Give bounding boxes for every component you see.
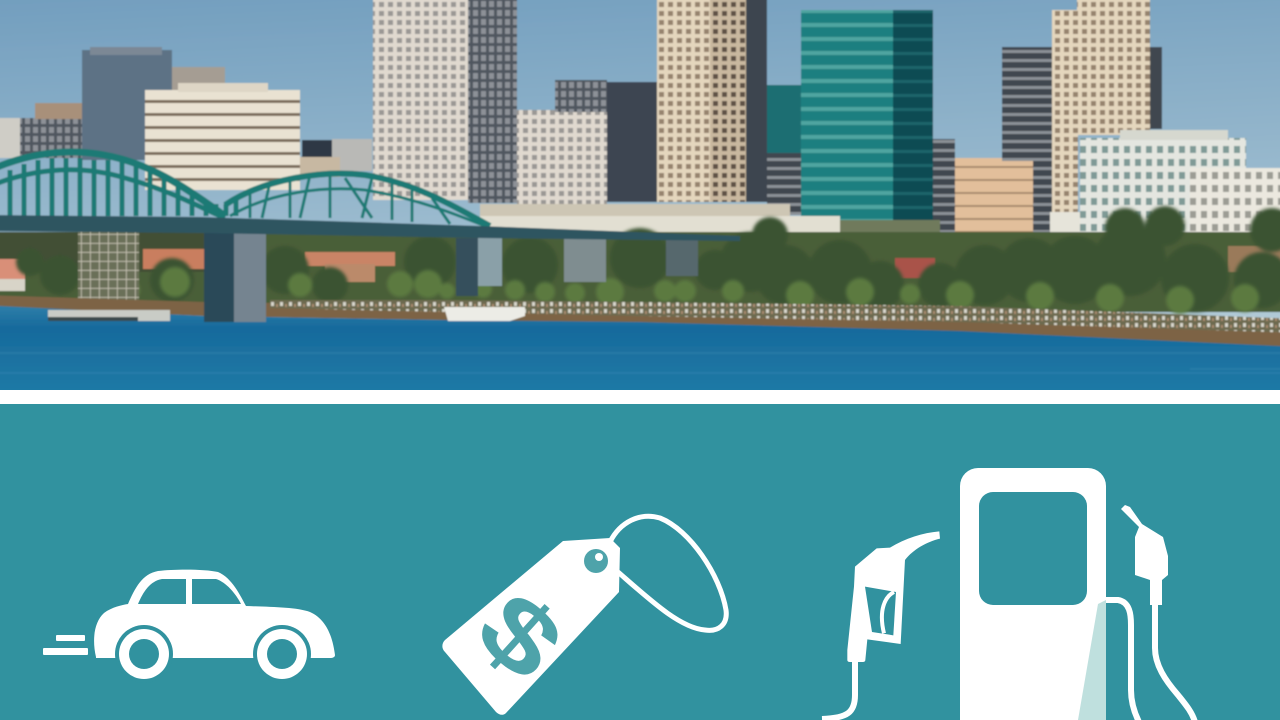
icon: fuel pump [822, 468, 1195, 720]
boats [48, 307, 525, 321]
buildings: central towers [373, 0, 955, 234]
tag body [442, 538, 620, 715]
scaffold tower [78, 232, 139, 314]
icon: moving car [43, 570, 335, 683]
car body [94, 570, 335, 658]
right nozzle [1121, 505, 1168, 605]
left nozzle [847, 531, 940, 662]
icon: price tag [442, 516, 726, 715]
bridge piers [204, 232, 698, 322]
tag hole [584, 549, 608, 573]
pump screen [979, 492, 1087, 605]
buildings: left cluster [0, 47, 372, 190]
divider band [0, 390, 1280, 405]
panel: city skyline photo [0, 0, 1280, 395]
bridge [0, 152, 740, 322]
tree band [0, 206, 1280, 314]
buildings: right cluster [955, 0, 1280, 246]
water [0, 305, 1280, 395]
bridge arches [0, 152, 490, 226]
shoreline [0, 295, 1280, 349]
speed lines [43, 635, 88, 655]
bridge deck [0, 215, 740, 241]
dollar sign: $ [456, 570, 585, 701]
panel: teal icon area [0, 404, 1280, 720]
elevated road [480, 204, 1280, 248]
pump shadow [1078, 600, 1106, 720]
tag string [610, 516, 726, 630]
pump body [960, 468, 1106, 720]
car windows [138, 579, 241, 604]
car wheels [115, 625, 311, 683]
pump hoses [822, 600, 1195, 720]
